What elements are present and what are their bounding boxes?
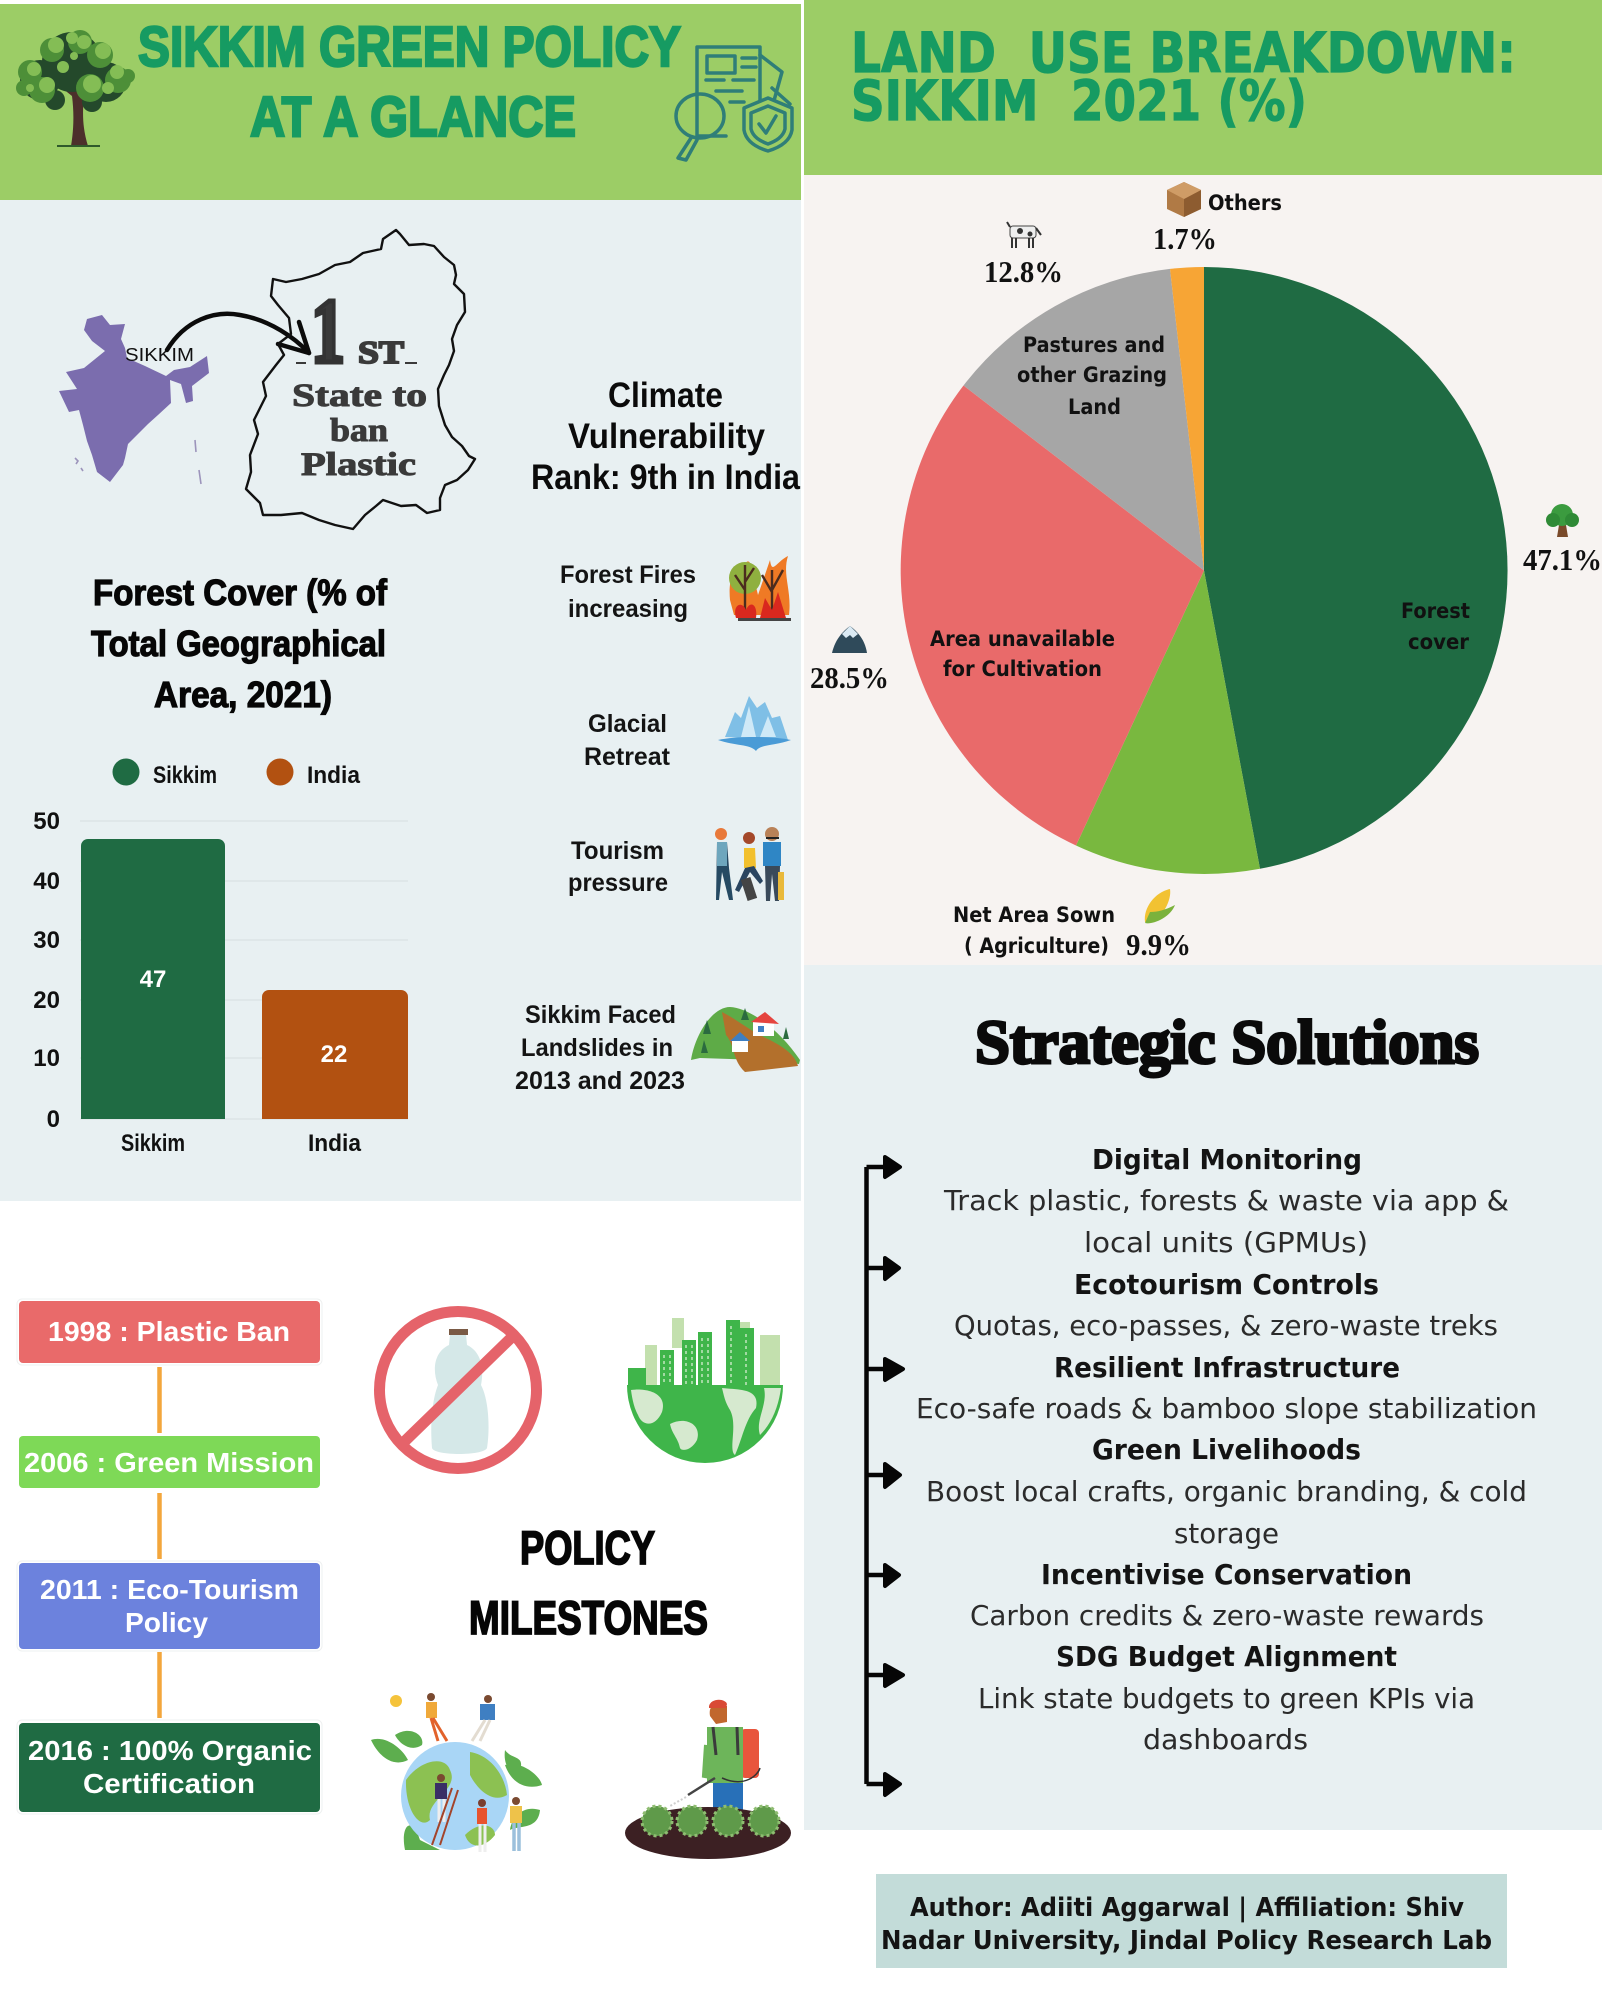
solution: resilient infrastructure: Resilient Infrastructure <box>1054 1351 1400 1384</box>
heading: climate vulnerability: Rank: 9th in India <box>531 458 800 497</box>
solution: green livelihoods <box>926 1433 1527 1550</box>
text block: 1st state to ban plastic: ST <box>358 334 404 370</box>
panel: left header <box>0 4 801 200</box>
heading: forest cover: Area, 2021) <box>154 674 332 715</box>
bar chart: forest cover: 10 <box>33 1045 60 1072</box>
author box: Author: Adiiti Aggarwal | Affiliation: Shiv <box>910 1893 1464 1923</box>
icon: tree <box>16 30 135 146</box>
arrow: India to Sikkim <box>167 314 309 353</box>
solution: sdg budget alignment: SDG Budget Alignment <box>1056 1640 1397 1673</box>
text: landslides: 2013 and 2023 <box>515 1067 685 1095</box>
solution: sdg budget alignment: Link state budgets to green KPIs via <box>978 1682 1475 1715</box>
text: tourism pressure: Tourism <box>571 837 664 865</box>
bar chart: forest cover: 40 <box>33 868 60 895</box>
solution: ecotourism controls: Ecotourism Controls <box>1074 1268 1379 1301</box>
label: pastures: other Grazing <box>1017 363 1167 387</box>
milestone 1998: 1998 : Plastic Ban <box>48 1316 290 1347</box>
solution: incentivise conservation: Carbon credits & zero-waste rewards <box>970 1599 1484 1632</box>
milestone 2006 <box>19 1436 320 1488</box>
solution: resilient infrastructure: Eco-safe roads & bamboo slope stabilization <box>916 1392 1537 1425</box>
author box: Nadar University, Jindal Policy Research Lab <box>881 1926 1492 1956</box>
bar: India 22: 22 <box>321 1041 347 1068</box>
bar chart: forest cover: 20 <box>33 987 60 1014</box>
title <box>138 15 681 149</box>
milestone 1998 <box>17 1299 322 1365</box>
milestone 2016: Certification <box>83 1768 255 1799</box>
label: net area sown <box>953 889 1191 962</box>
label: area unavailable: for Cultivation <box>943 657 1102 681</box>
bar: India 22 <box>262 990 408 1119</box>
label: pastures <box>1017 333 1167 419</box>
bar: Sikkim 47: 47 <box>140 966 166 993</box>
text: glacial retreat: Glacial <box>588 710 667 738</box>
heading: strategic solutions: Strategic Solutions <box>975 1009 1479 1077</box>
bar chart: forest cover: India <box>308 1130 362 1157</box>
milestone 2011: 2011 : Eco-Tourism <box>40 1574 299 1605</box>
heading: forest cover: Total Geographical <box>91 623 386 664</box>
milestone 2011 <box>17 1561 322 1651</box>
icon: farmer spraying plants <box>625 1700 791 1859</box>
bar chart: forest cover: Sikkim <box>121 1130 185 1157</box>
heading: forest cover <box>91 572 388 715</box>
title: SIKKIM GREEN POLICY <box>138 15 681 79</box>
label: net area sown: ( Agriculture) <box>964 934 1109 958</box>
solution: incentivise conservation: Incentivise Conservation <box>1041 1558 1412 1591</box>
solution: ecotourism controls <box>954 1268 1498 1342</box>
icon: landslide <box>691 1007 800 1072</box>
text: tourism pressure <box>568 837 668 897</box>
text: landslides: Landslides in <box>521 1034 673 1062</box>
label: forest cover: cover <box>1408 630 1470 654</box>
heading: land use breakdown: SIKKIM 2021 (%) <box>851 69 1307 133</box>
solution: sdg budget alignment <box>978 1640 1475 1756</box>
text: forest fires: increasing <box>568 595 688 623</box>
icon: forest fire <box>729 556 791 621</box>
bar chart: forest cover: 0 <box>47 1106 60 1133</box>
panel: left climate and forest background <box>0 200 801 1201</box>
text block: 1st state to ban plastic: 1 <box>311 280 345 382</box>
solution: digital monitoring: Digital Monitoring <box>1092 1143 1362 1176</box>
legend <box>112 758 361 789</box>
label: pastures: Land <box>1068 395 1121 419</box>
label: pastures: Pastures and <box>1023 333 1165 357</box>
solution: digital monitoring <box>943 1143 1509 1259</box>
bar: Sikkim 47 <box>81 839 225 1119</box>
panel: strategic solutions <box>804 965 1602 1830</box>
heading: policy milestones: MILESTONES <box>469 1591 708 1644</box>
solution: green livelihoods: Boost local crafts, organic branding, & cold <box>926 1475 1527 1508</box>
panel: land use pie background <box>804 175 1602 965</box>
text: landslides <box>515 1001 685 1095</box>
heading: climate vulnerability <box>531 376 800 497</box>
text: tourism pressure: pressure <box>568 869 668 897</box>
text block: 1st state to ban plastic: State to <box>292 378 427 414</box>
legend: Sikkim <box>153 762 217 789</box>
text block: 1st state to ban plastic: Plastic <box>301 447 416 483</box>
milestone 2011: Policy <box>125 1607 208 1638</box>
label: pastures value: 12.8% <box>984 254 1063 289</box>
panel: right header <box>804 0 1602 175</box>
text: glacial retreat: Retreat <box>584 743 671 771</box>
author box <box>876 1874 1507 1968</box>
label: Sikkim on map: SIKKIM <box>125 345 194 365</box>
text: glacial retreat <box>584 710 671 771</box>
label: forest value <box>1523 504 1602 577</box>
label: others: 1.7% <box>1153 221 1217 256</box>
label: pastures value <box>984 222 1063 289</box>
label: net area sown: Net Area Sown <box>953 903 1115 927</box>
title: AT A GLANCE <box>250 85 576 149</box>
label: unavailable value <box>810 626 889 695</box>
label: net area sown: 9.9% <box>1126 927 1191 962</box>
icon: earth with people <box>371 1693 542 1852</box>
bar chart: forest cover: 30 <box>33 927 60 954</box>
bar chart: forest cover: 50 <box>33 808 60 835</box>
icon: policy document with magnifier and shield <box>676 47 792 160</box>
icon: india map <box>59 315 209 484</box>
text: landslides: Sikkim Faced <box>525 1001 676 1029</box>
solution: digital monitoring: local units (GPMUs) <box>1084 1226 1368 1259</box>
label: forest cover <box>1401 599 1470 654</box>
heading: climate vulnerability: Vulnerability <box>568 417 765 456</box>
heading: forest cover: Forest Cover (% of <box>93 572 388 613</box>
milestone 2006: 2006 : Green Mission <box>24 1447 314 1478</box>
heading: climate vulnerability: Climate <box>608 376 723 415</box>
panel: policy milestones timeline <box>17 1299 322 1814</box>
connectors <box>157 1367 162 1718</box>
text block: 1st state to ban plastic: ban <box>330 413 388 449</box>
sikkim state outline <box>246 230 475 529</box>
icon: no plastic bottle <box>380 1312 536 1468</box>
solution: green livelihoods: storage <box>1174 1517 1279 1550</box>
bar chart: forest cover <box>33 808 408 1157</box>
heading: policy milestones: POLICY <box>520 1521 655 1574</box>
solution: ecotourism controls: Quotas, eco-passes, & zero-waste treks <box>954 1309 1498 1342</box>
solution: green livelihoods: Green Livelihoods <box>1092 1433 1361 1466</box>
icon: tourists <box>715 827 784 901</box>
icon: glacier <box>718 696 791 751</box>
solution: incentivise conservation <box>970 1558 1484 1632</box>
label: area unavailable <box>930 627 1115 681</box>
icon: green city globe <box>627 1318 783 1463</box>
solution: resilient infrastructure <box>916 1351 1537 1425</box>
milestone 2016 <box>17 1720 322 1814</box>
label: others <box>1153 182 1282 256</box>
label: unavailable value: 28.5% <box>810 660 889 695</box>
heading: policy milestones <box>469 1521 708 1644</box>
text: forest fires <box>560 561 696 623</box>
solution: sdg budget alignment: dashboards <box>1143 1723 1308 1756</box>
heading: land use breakdown <box>851 21 1516 133</box>
arrow bracket <box>866 1157 903 1795</box>
solution: digital monitoring: Track plastic, forests & waste via app & <box>943 1184 1509 1217</box>
text block: 1st state to ban plastic <box>292 280 427 483</box>
text: forest fires: Forest Fires <box>560 561 696 589</box>
label: others: Others <box>1208 191 1282 215</box>
pie chart <box>901 267 1508 874</box>
label: forest cover: Forest <box>1401 599 1470 623</box>
milestone 2016: 2016 : 100% Organic <box>28 1735 312 1766</box>
label: area unavailable: Area unavailable <box>930 627 1115 651</box>
legend: India <box>307 762 361 789</box>
